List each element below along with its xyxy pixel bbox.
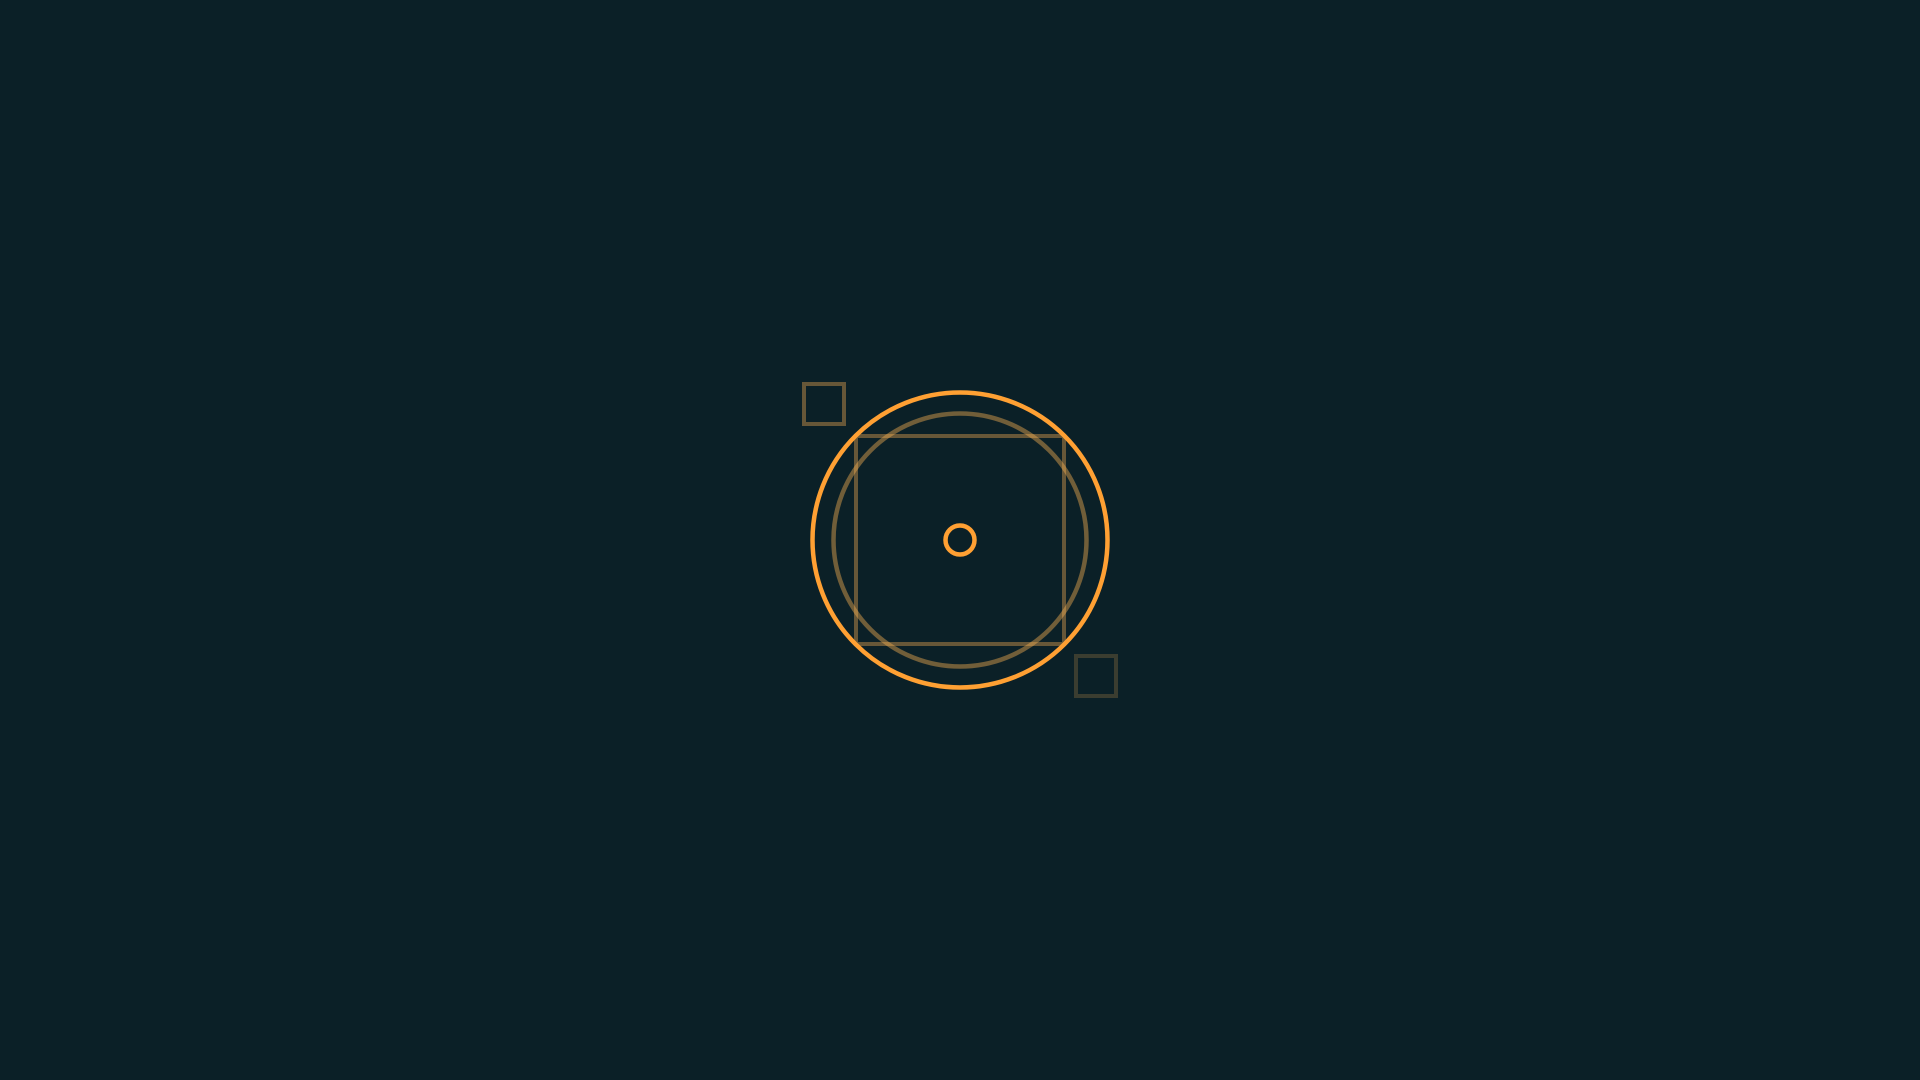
- bottom-right small square: [1076, 656, 1116, 696]
- top-left small square: [804, 384, 844, 424]
- inner circle: [834, 414, 1086, 666]
- central square: [856, 436, 1064, 644]
- outer circle: [812, 392, 1108, 688]
- center ring: [946, 526, 974, 554]
